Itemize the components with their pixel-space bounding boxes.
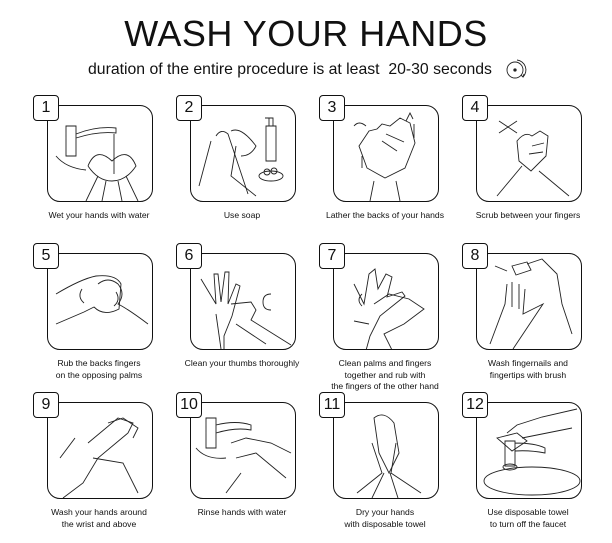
- number 4: 4: [471, 99, 479, 116]
- number 3: 3: [328, 99, 336, 116]
- number 7: 7: [328, 247, 336, 264]
- panel 4: [462, 95, 582, 220]
- illustration 12: [484, 408, 580, 496]
- number 7: [319, 243, 345, 269]
- caption 7: together and rub with: [345, 370, 425, 380]
- caption 11: [344, 507, 426, 528]
- subtitle: duration of the entire procedure is at least 20-30 seconds: [88, 61, 492, 78]
- panel 2: [176, 95, 296, 220]
- number 12: [462, 392, 488, 418]
- illustration 7: [354, 268, 425, 349]
- number 8: [462, 243, 488, 269]
- illustration 5: [56, 275, 148, 324]
- illustration 9: [60, 418, 138, 498]
- caption 10: Rinse hands with water: [198, 507, 286, 517]
- number 6: [176, 243, 202, 269]
- caption 9: Wash your hands around: [51, 507, 147, 517]
- number 11: [319, 392, 345, 418]
- caption 11: Dry your hands: [356, 507, 414, 517]
- caption 12: Use disposable towel: [487, 507, 569, 517]
- number 11: 11: [324, 396, 340, 413]
- illustration 2: [198, 118, 284, 196]
- illustration 8: [490, 258, 572, 349]
- caption 6: Clean your thumbs thoroughly: [185, 358, 299, 368]
- number 1: 1: [42, 99, 50, 116]
- caption 7: [331, 358, 439, 391]
- caption 12: [487, 507, 569, 528]
- number 9: 9: [42, 396, 50, 413]
- number 6: 6: [185, 247, 193, 264]
- number 10: 10: [180, 396, 198, 413]
- caption 8: [488, 358, 568, 380]
- icon: clock: [506, 60, 526, 78]
- caption 5: [56, 358, 142, 380]
- number 3: [319, 95, 345, 121]
- panel 12: [462, 392, 582, 528]
- illustration 3: [354, 112, 416, 201]
- caption 11: with disposable towel: [344, 518, 426, 528]
- panel 5: [33, 243, 153, 380]
- illustration 6: [200, 272, 292, 349]
- panel 9: [33, 392, 153, 528]
- number 12: 12: [466, 396, 484, 413]
- caption 4: Scrub between your fingers: [476, 210, 580, 220]
- caption 7: Clean palms and fingers: [339, 358, 431, 368]
- caption 1: Wet your hands with water: [48, 210, 150, 220]
- number 4: [462, 95, 488, 121]
- caption 8: Wash fingernails and: [488, 358, 568, 368]
- number 8: 8: [471, 247, 479, 264]
- title: WASH YOUR HANDS: [124, 13, 488, 54]
- caption 9: the wrist and above: [62, 518, 136, 528]
- caption 5: on the opposing palms: [56, 370, 142, 380]
- caption 3: Lather the backs of your hands: [326, 210, 444, 220]
- panel 11: [319, 392, 439, 528]
- number 10: [176, 392, 202, 418]
- panel 10: [176, 392, 296, 517]
- caption 5: Rub the backs fingers: [57, 358, 141, 368]
- panel 3: [319, 95, 444, 220]
- illustration 1: [56, 126, 138, 201]
- panel 6: [176, 243, 300, 368]
- number 2: 2: [185, 99, 193, 116]
- number 5: 5: [42, 247, 50, 264]
- number 2: [176, 95, 202, 121]
- caption 2: Use soap: [224, 210, 260, 220]
- illustration 10: [196, 418, 292, 494]
- caption 9: [51, 507, 147, 528]
- caption 7: the fingers of the other hand: [331, 381, 439, 391]
- illustration 11: [356, 414, 422, 498]
- panel 7: [319, 243, 439, 391]
- number 5: [33, 243, 59, 269]
- caption 8: fingertips with brush: [490, 370, 566, 380]
- number 1: [33, 95, 59, 121]
- number 9: [33, 392, 59, 418]
- panel 1: [33, 95, 153, 220]
- caption 12: to turn off the faucet: [490, 518, 566, 528]
- illustration 4: [496, 120, 570, 196]
- panel 8: [462, 243, 582, 380]
